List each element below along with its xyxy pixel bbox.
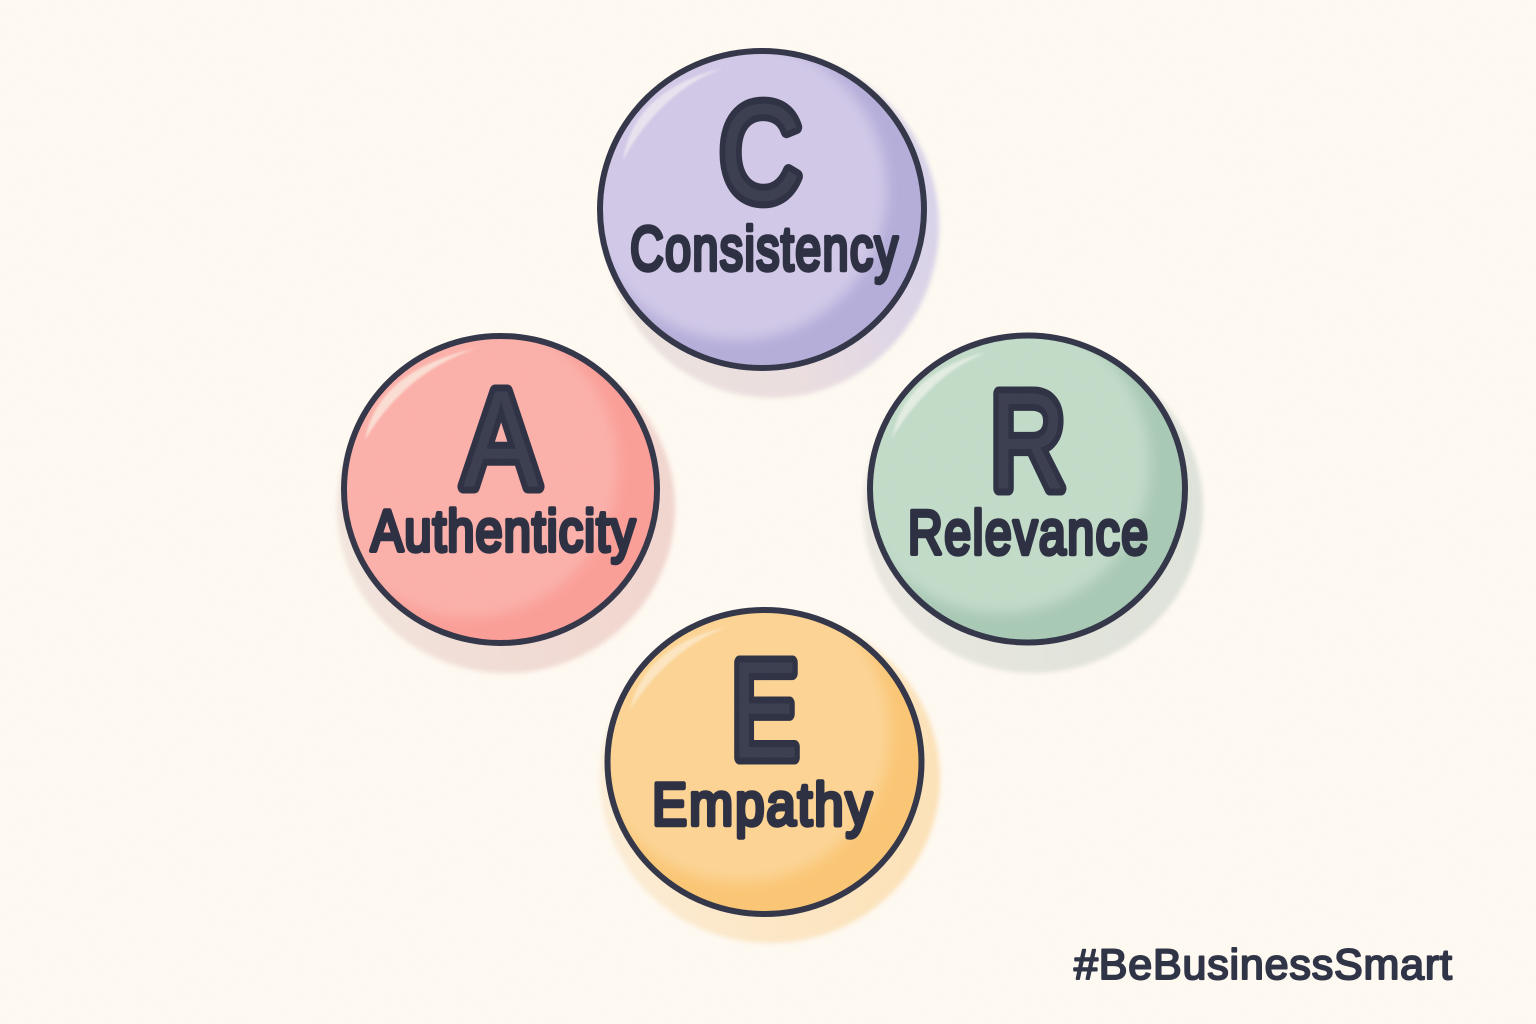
circle: Relevance: [850, 313, 1203, 673]
circle: Consistency: [587, 40, 939, 398]
letter C: C: [720, 76, 802, 230]
letter A: A: [463, 362, 539, 516]
circle: Empathy: [590, 582, 940, 943]
hashtag: #BeBusinessSmart: [1074, 941, 1452, 989]
label Authenticity: Authenticity: [371, 500, 635, 564]
circle: Authenticity: [318, 317, 675, 673]
label Consistency: Consistency: [630, 213, 898, 284]
label Empathy: Empathy: [652, 771, 873, 838]
label Relevance: Relevance: [908, 498, 1148, 567]
letter R: R: [990, 364, 1066, 518]
letter E: E: [731, 634, 799, 788]
